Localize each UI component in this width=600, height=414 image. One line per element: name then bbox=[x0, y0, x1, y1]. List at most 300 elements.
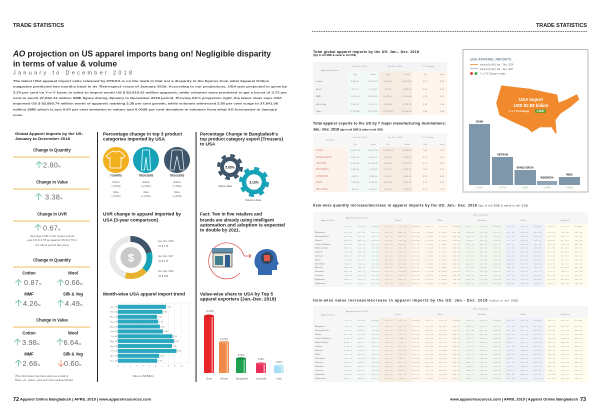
import bars by country bbox=[469, 120, 580, 190]
map of USA: USA Import bbox=[519, 97, 544, 102]
table: imports by country: 30,141.60 bbox=[368, 150, 379, 152]
table: imports by country: 4.16 bbox=[440, 182, 445, 184]
table: imports by country: 1,612.07 bbox=[369, 189, 378, 191]
table: global imports by segment: 3.38 bbox=[440, 111, 445, 113]
table: imports by country: 1,097.61 bbox=[384, 182, 393, 184]
icon: denim trousers bbox=[133, 147, 159, 173]
table: item-wise quantity: Jan-17 Jan-18 Change Jan-17 Jan-18 Change Jan-17 Jan-18 Change Jan-17 Jan-18 Change Jan-17 Jan-18 Change Jan-17 Jan-18 Change bbox=[344, 225, 583, 228]
change in quantity by fibre: 4.26% bbox=[23, 299, 41, 308]
change in quantity stat: 2.80% bbox=[43, 160, 61, 170]
table: imports by country: 1,054.80 bbox=[351, 182, 360, 184]
table: imports by country: 2,062.41 bbox=[351, 157, 360, 159]
icon: volume gear: 3.13% bbox=[249, 180, 259, 184]
heading: item-wise value table: Item-wise value increase/decrease in apparel imports by the US: Jan.- Dec. 2018 (value in mil US$) bbox=[313, 298, 518, 302]
table 3 values: 276.84 289.51 104.58 98.625 103.41 104.85 2.0851 2.1476 103.00 174.32 182.64 104.77 88.147 91.733 104.07 87.215 90.522 103.79 bbox=[344, 251, 583, 254]
heading: to USA bbox=[200, 142, 216, 146]
fact text bbox=[200, 212, 285, 232]
change in quantity by fibre: Silk & Veg bbox=[63, 292, 83, 296]
donut labels: US $ 3.76 bbox=[158, 261, 169, 263]
intro paragraph bbox=[13, 79, 288, 117]
article title bbox=[12, 48, 271, 68]
table: global imports by segment: 0.66 bbox=[423, 89, 428, 91]
table 3 row labels: Trousers bbox=[315, 274, 324, 277]
column chart: Bangladesh bbox=[236, 378, 249, 380]
panel: value-wise share by top 5 exporters bbox=[200, 292, 284, 380]
article title: in terms of value & volume bbox=[13, 58, 117, 68]
table: global imports by segment: 37,146.88 bbox=[402, 96, 413, 98]
table 4 values: 3841.7 3962.5 103.14 2412.6 2483.2 102.93 21.684 22.718 104.77 1392.4 1447.8 103.98 874.36 911.52 104.25 518.04 536.28 103.52 bbox=[344, 377, 583, 380]
change in value stat bbox=[13, 180, 90, 202]
table 3 row labels: Knit Shirts bbox=[315, 262, 326, 265]
donut labels: Jan.-Dec. 2017 bbox=[158, 256, 174, 258]
right page footer bbox=[449, 397, 586, 403]
table: global imports by segment: 2.80 bbox=[423, 111, 428, 113]
table 3 values: 512.36 525.18 102.50 189.23 193.87 102.45 7.6230 7.8845 103.43 307.41 316.24 102.87 146.32 150.68 102.98 163.28 168.73 103.33 bbox=[344, 243, 583, 246]
import bars by country: 5.37% bbox=[499, 186, 507, 190]
table: imports by country: 5.16 bbox=[423, 163, 428, 165]
table: imports by country: 3,741.55 bbox=[403, 182, 412, 184]
heading: total global imports table: Total global apparel imports by the US: Jan.- Dec. 2018 bbox=[313, 50, 419, 54]
change in quantity by fibre bbox=[13, 258, 90, 308]
table: imports by country: Y-Y Change bbox=[422, 137, 435, 139]
map of USA: Y o Y % Change bbox=[509, 109, 530, 113]
table: imports by country: 2,309.56 bbox=[369, 176, 378, 178]
horizontal bar chart: Jul-18 bbox=[111, 336, 118, 338]
table: global imports by segment: 9,566.91 bbox=[384, 81, 393, 83]
table: imports by country: 12,211.73 bbox=[402, 163, 413, 165]
map legend bbox=[470, 58, 514, 76]
heading: total imports by manufacturing destinations: Jan.- Dec. 2018 (qty in mil SME & value in mil US$) bbox=[313, 128, 383, 132]
table: global imports by segment: 80,178.81 bbox=[368, 111, 379, 113]
intro paragraph: issue. bbox=[13, 113, 23, 117]
table: item-wise value: Synthetic bbox=[478, 313, 487, 316]
column chart: China bbox=[206, 378, 213, 380]
import bars by country: CHINA bbox=[476, 120, 484, 124]
table 4 values: 6127.3 6318.5 103.12 4214.6 4332.7 102.80 62.841 65.124 103.63 1812.4 1885.6 104.04 1387.2 1442.8 104.01 425.21 442.77 104.13 bbox=[344, 357, 583, 360]
map legend: USA APPAREL IMPORTS bbox=[470, 58, 512, 62]
import bars by country: VIETNAM bbox=[497, 154, 508, 156]
panel: UVR change bbox=[103, 212, 181, 278]
table: global imports by segment: 4.49 bbox=[423, 104, 428, 106]
change in quantity by fibre: 4.49% bbox=[65, 299, 83, 308]
horizontal bar chart: May-18 bbox=[110, 326, 118, 328]
right page header: TRADE STATISTICS bbox=[536, 23, 588, 29]
trousers labels: Value bbox=[174, 192, 181, 194]
table: imports by country: Jan.-Dec. 2018 bbox=[388, 137, 403, 139]
column chart: 3.40% bbox=[258, 359, 264, 361]
change in value by fibre: 3.98% bbox=[22, 338, 40, 347]
table 4 values: 742.15 768.32 103.53 267.34 275.91 103.21 38.426 40.287 104.84 421.72 437.28 103.69 285.64 296.47 103.79 136.08 140.81 103.48 bbox=[344, 353, 583, 356]
table 4 values: 2412.8 2466.3 102.22 1233.5 1267.4 102.75 24.112 25.607 106.20 1098.4 1121.7 102.12 772.45 788.13 102.03 325.91 333.60 102.36 bbox=[344, 325, 583, 328]
table 4 values: 3216.8 3291.5 102.32 612.47 629.38 102.76 71.512 74.806 104.61 2461.3 2515.8 102.21 1824.6 1869.3 102.45 636.72 646.51 101.54 bbox=[344, 349, 583, 352]
denim labels: (+0.66%) bbox=[141, 186, 151, 188]
table: global imports by segment: Silk & Veg bbox=[316, 104, 327, 106]
change in value by fibre: 2.66% bbox=[22, 359, 41, 368]
gear labels: Volume data bbox=[245, 198, 261, 202]
donut labels: Jan.-Dec. 2018 bbox=[158, 241, 174, 243]
import bars by country: 1.42% bbox=[476, 186, 484, 190]
table: global imports by segment: 0.87 bbox=[423, 81, 428, 83]
change in UVR stat: (Average UVR in the review period bbox=[30, 234, 75, 238]
fact text: to double by 2021. bbox=[200, 228, 240, 232]
sidebar heading: January to December 2018 bbox=[15, 137, 70, 141]
trousers labels: (-1.69%) bbox=[173, 186, 182, 188]
table: imports by country: 2,139.71 bbox=[384, 157, 393, 159]
change in value by fibre: 6.64% bbox=[64, 338, 82, 347]
table: global imports by segment: Qty bbox=[423, 73, 428, 76]
intro paragraph: cent to touch 27,842.44 million SME figure during January to December 2018 period. Proving AO's projection right, the latest stats says USA bbox=[13, 96, 283, 100]
panel: top 3 product categories bbox=[103, 132, 190, 198]
table 4 values: 3512.4 3627.1 103.27 2087.6 2146.2 102.81 46.137 48.215 104.50 1312.5 1362.8 103.83 1024.3 1062.7 103.75 288.17 300.04 104.12 bbox=[344, 341, 583, 344]
change in quantity stat bbox=[13, 148, 90, 170]
table: global imports by segment: 3.98 bbox=[440, 81, 445, 83]
heading: USA (3-year comparison) bbox=[103, 218, 158, 222]
column chart: India bbox=[277, 378, 282, 380]
table: imports by country: 3.13 bbox=[423, 157, 428, 159]
table: item-wise value: Man-made fibre bbox=[473, 308, 489, 310]
table: imports by country: Value bbox=[439, 144, 445, 146]
table 3 values: 386.72 398.14 102.95 178.61 183.42 102.69 0.9714 1.0235 105.36 205.38 212.95 103.69 152.76 157.42 103.05 52.615 55.530 105.54 bbox=[344, 278, 583, 281]
column chart: 14.74% bbox=[220, 339, 228, 341]
horizontal bar chart: Apr-18 bbox=[110, 320, 118, 323]
table 3 values: 1342.7 1381.4 102.88 932.18 951.46 102.07 2.9054 3.0218 104.01 402.87 421.33 104.58 288.94 299.05 103.50 113.57 119.62 105.33 bbox=[344, 262, 583, 265]
horizontal bar chart: Sep-18 bbox=[110, 346, 118, 348]
sidebar footnote: fibers, viz. cotton, wool and man-made/synthetic) bbox=[15, 378, 73, 382]
table: global imports by segment: 15,695.61 bbox=[383, 96, 394, 98]
heading bbox=[200, 292, 276, 302]
table: imports by country: Qty bbox=[386, 143, 391, 146]
panel: month-wise import trend bbox=[103, 292, 189, 378]
gear labels: Value data bbox=[218, 184, 232, 188]
t-shirts labels: (-0.54%) bbox=[112, 196, 121, 198]
trousers labels: (-4.44%) bbox=[173, 196, 182, 198]
fact text: Fact: Two in five retailers and bbox=[200, 212, 262, 216]
table: imports by country: 10,625.40 bbox=[350, 150, 361, 152]
heading bbox=[103, 132, 182, 142]
horizontal bar chart: Jan-18 bbox=[110, 307, 118, 309]
table: global imports by segment: Value bbox=[404, 74, 410, 76]
donut labels: Jan.-Dec. 2016 bbox=[158, 271, 174, 273]
table 4 row labels bbox=[315, 325, 332, 380]
change in UVR stat: the same period last year) bbox=[35, 243, 69, 247]
change in value by fibre: Change in Value bbox=[36, 318, 69, 322]
table: imports by country: 4.06 bbox=[423, 182, 428, 184]
horizontal bar chart: Nov-18 bbox=[110, 356, 118, 358]
table: imports by country: 11,589.08 bbox=[368, 163, 379, 165]
t-shirts labels: Volume bbox=[112, 182, 121, 184]
table 4 row labels: Dresses bbox=[315, 349, 324, 352]
donut labels: US $ 3.85 bbox=[158, 276, 169, 278]
map of USA: 3.38% bbox=[537, 109, 545, 113]
table: global imports by segment: 2,890.45 bbox=[403, 89, 412, 91]
table: global imports by segment: Value bbox=[370, 74, 376, 76]
panel: retail fact bbox=[200, 212, 285, 279]
horizontal bar chart: 8.60 bbox=[177, 351, 182, 353]
sidebar footnote bbox=[15, 374, 73, 382]
table 4 values: 14218. 14716. 103.50 9824.5 10118. 102.99 247.31 258.64 104.58 3998.6 4184.4 104.65 2812.5 2941.7 104.59 1186.1 1242.7 104.77 bbox=[344, 369, 583, 372]
heading: Percentage change in top 3 product bbox=[103, 132, 182, 136]
table: imports by country: VIETNAM bbox=[316, 162, 326, 165]
column chart: 6.51% bbox=[238, 355, 244, 357]
table: item-wise quantity: Apparel Imports (in mil) bbox=[346, 216, 369, 220]
table 3 row labels: Shirts & Tops bbox=[315, 247, 329, 250]
table 3 values: 358.46 369.15 102.98 134.71 139.26 103.38 1.3302 1.3915 104.61 217.62 223.87 102.87 155.38 160.24 103.13 62.115 64.031 103.08 bbox=[344, 266, 583, 269]
table: item-wise value bbox=[313, 306, 588, 382]
table 3 values: 927.42 947.18 102.13 481.27 488.94 101.59 4.1035 4.2216 102.88 429.61 441.53 102.77 312.65 318.44 101.85 112.27 115.06 102.48 bbox=[344, 231, 583, 234]
column chart: 4.51% bbox=[276, 362, 282, 364]
horizontal bar chart: 6.60 bbox=[164, 331, 169, 333]
table 4 row labels: Skirts bbox=[315, 353, 321, 356]
change in value by fibre: Cotton bbox=[22, 330, 36, 336]
table: imports by country: 5,055.52 bbox=[369, 157, 378, 159]
icon: store in circle with arrow to head bbox=[209, 243, 279, 279]
donut chart: $ bbox=[128, 252, 134, 264]
heading: Percentage Change in Bangladesh's bbox=[200, 132, 278, 136]
horizontal bar chart: Mar-18 bbox=[110, 316, 118, 319]
import bars by country: BANGLADESH bbox=[517, 166, 534, 170]
table: imports by country: 3.72 bbox=[423, 189, 428, 191]
table 3 row labels: Coats & Blazers bbox=[315, 243, 332, 246]
table: global imports by segment: 27,081.86 bbox=[350, 111, 361, 113]
table 3 row labels: Babywear bbox=[315, 231, 325, 234]
table: global imports by segment: 4.26 bbox=[423, 96, 428, 98]
table 4 row labels: Shirts & Tops bbox=[315, 341, 329, 344]
table 3 row labels: Underwear bbox=[315, 282, 326, 285]
table 3 row labels: Gloves bbox=[315, 240, 323, 242]
map legend: Y o Y % Change in value bbox=[480, 74, 506, 76]
article title: AO projection on US apparel imports bang on! Negligible disparity bbox=[12, 48, 271, 58]
table 4 row labels: Blouses bbox=[315, 362, 324, 364]
table: global imports by segment: 2,710.43 bbox=[369, 89, 378, 91]
table: global imports by segment: MMF bbox=[316, 96, 322, 98]
change in quantity by fibre: Cotton bbox=[22, 270, 36, 276]
table 4 row labels: Sweaters bbox=[315, 365, 325, 368]
change in UVR stat bbox=[13, 212, 90, 247]
table 4 values: 1786.2 1853.4 103.76 452.71 469.15 103.63 64.283 68.541 106.62 1214.6 1267.2 104.33 812.54 847.63 104.32 402.03 419.61 104.37 bbox=[344, 345, 583, 348]
import bars by country: INDIA bbox=[566, 174, 573, 176]
table: global imports by segment: 82,880.74 bbox=[402, 111, 413, 113]
table: item-wise quantity: Synthetic bbox=[478, 219, 487, 222]
change in value by fibre: Silk & Veg bbox=[63, 352, 83, 356]
table 3 values: 142.65 149.27 104.64 65.384 67.921 103.88 0.8142 0.8571 105.27 75.243 79.184 105.24 50.662 53.104 104.82 24.518 25.776 105.13 bbox=[344, 258, 583, 261]
table: imports by country: 5.37 bbox=[440, 163, 445, 165]
table: imports by country: 3,664.81 bbox=[384, 163, 393, 165]
table 3 row labels: Hosiery/Socks bbox=[315, 235, 330, 238]
table: global imports by segment: 2.66 bbox=[440, 96, 445, 98]
table: imports by country: 30,568.19 bbox=[402, 150, 413, 152]
import bars by country: 4.16% bbox=[566, 186, 574, 190]
change in quantity by fibre: MMF bbox=[24, 292, 34, 296]
table: global imports by segment: -0.60 bbox=[440, 104, 445, 106]
table 4 values: 4871.2 5024.6 103.15 1923.8 1987.3 103.30 586.41 612.74 104.49 2298.4 2374.5 103.31 1312.6 1361.2 103.70 985.78 1013.3 102.79 bbox=[344, 365, 583, 368]
map legend: Imports (in Mil.) Jan. - Dec. 2017 bbox=[480, 68, 514, 71]
heading: item-wise quantity table: Item-wise quantity increase/decrease in apparel imports by the US: Jan.- Dec. 2018 (qty in mil SME & value in mil US$) bbox=[313, 204, 528, 208]
left page header: TRADE STATISTICS bbox=[13, 23, 65, 29]
map legend: Imports (in Mil.) Jan. - Dec. 2018 bbox=[480, 64, 514, 66]
table: imports by country: 1,074.07 bbox=[384, 169, 393, 171]
table: item-wise quantity: Apparel Items bbox=[321, 219, 336, 222]
table: imports by country: 1,730.42 bbox=[403, 189, 412, 191]
table 4 row labels: Hosiery/Socks bbox=[315, 329, 330, 332]
heading: Value-wise share to USA by Top 5 bbox=[200, 292, 273, 296]
horizontal bar chart: Oct-18 bbox=[110, 350, 118, 353]
table: global imports by segment: Wool bbox=[316, 89, 321, 91]
heading: total imports by manufacturing destinations: Total apparel exports to the US by 7 major manufacturing destinations: bbox=[313, 122, 446, 126]
table: global imports by segment: Jan.-Dec. 2017 bbox=[353, 66, 368, 68]
table 3 row labels: Nightwear bbox=[315, 278, 325, 281]
map of USA bbox=[497, 86, 579, 133]
heading: categories imported by USA bbox=[103, 136, 166, 142]
change in value by fibre: 0.60% bbox=[64, 359, 82, 368]
chart note: (Value in US$ Billion) bbox=[132, 376, 154, 378]
table: imports by country: Jan.-Dec. 2017 bbox=[353, 137, 368, 139]
table: global imports by segment: Qty bbox=[386, 73, 391, 76]
table 3 values: 618.27 633.45 102.46 141.36 145.82 103.15 1.2463 1.3127 105.33 473.81 484.51 102.26 341.22 350.48 102.71 132.45 135.87 102.58 bbox=[344, 254, 583, 258]
heading: top product category export (Trousers) bbox=[200, 136, 283, 142]
denim labels: TROUSERS bbox=[139, 174, 153, 178]
horizontal bar chart: 6.20 bbox=[160, 326, 166, 328]
table: global imports by segment: 36,183.45 bbox=[368, 96, 379, 98]
table: imports by country: 2.76 bbox=[440, 169, 445, 171]
intro paragraph: The latest USA apparel import stats released by OTEXA is on the mark in that not a disparity in the figures from what Apparel Online bbox=[13, 79, 269, 83]
gear labels bbox=[218, 184, 261, 202]
table 3 row labels: Dresses bbox=[315, 254, 324, 258]
table 4 row labels: Gloves bbox=[315, 334, 323, 336]
left page footer: 72 bbox=[13, 397, 19, 403]
table: imports by country: 2,495.33 bbox=[403, 176, 412, 178]
table: item-wise value: Cotton bbox=[395, 313, 402, 316]
table 3 values: 1247.6 1284.5 102.96 743.28 761.52 102.45 0.6531 0.6872 105.22 501.42 521.47 104.00 318.65 331.29 103.97 182.77 190.18 104.05 bbox=[344, 282, 583, 285]
table: imports by country: 5,405.13 bbox=[403, 157, 412, 159]
panel: USA apparel imports map and bars bbox=[463, 50, 588, 192]
table: imports by country: -0.87 bbox=[422, 169, 428, 171]
table: imports by country: 619.73 bbox=[352, 176, 359, 178]
table: imports by country: 5.65 bbox=[440, 157, 445, 159]
table 4 values: 1512.6 1558.4 103.03 583.47 601.26 103.05 28.315 29.672 104.79 883.21 911.37 103.19 612.74 632.51 103.23 270.47 278.86 103.10 bbox=[344, 361, 583, 364]
horizontal bar chart: 8.13 bbox=[173, 336, 178, 338]
table: global imports by segment: 152.26 bbox=[385, 89, 392, 91]
table: global imports by segment: Qty bbox=[353, 73, 358, 76]
horizontal bar chart: 5.77 bbox=[158, 360, 163, 362]
table: imports by country: 312.78 bbox=[385, 189, 392, 191]
table: global imports by segment: 27,841.08 bbox=[383, 111, 394, 113]
heading: Month-wise USA apparel import trend bbox=[103, 292, 185, 296]
table 4 row labels: Nightwear bbox=[315, 373, 325, 376]
horizontal bar chart: 5.75 bbox=[159, 321, 164, 323]
table: imports by country: Countries bbox=[325, 138, 336, 142]
table: global imports by segment: Jan.-Dec. 2018 bbox=[388, 66, 403, 68]
table: imports by country: SRI LANKA bbox=[316, 188, 328, 191]
table: imports by country: Qty bbox=[353, 143, 358, 146]
table 4 row labels: Knit Shirts bbox=[315, 357, 326, 360]
column chart: 41.00% bbox=[206, 311, 214, 313]
horizontal bar chart: Aug-18 bbox=[110, 340, 118, 343]
table: item-wise value: Cellulosic bbox=[560, 314, 571, 316]
column chart: Vietnam bbox=[220, 378, 228, 380]
table 3 values: 894.16 921.73 103.08 536.72 551.38 102.73 5.4118 5.6207 103.86 349.23 361.95 103.64 277.15 285.46 103.00 78.402 81.276 103.67 bbox=[344, 247, 583, 250]
table: imports by country: 3,484.93 bbox=[351, 163, 360, 165]
t-shirts labels bbox=[110, 174, 122, 198]
horizontal bar chart: Feb-18 bbox=[110, 312, 118, 314]
table 3 row labels: Blouses bbox=[315, 267, 324, 269]
table: item-wise quantity: Cotton bbox=[520, 219, 527, 222]
icon: trousers bbox=[164, 147, 190, 173]
trousers labels bbox=[170, 174, 184, 198]
sidebar heading: Global Apparel Imports by the US: bbox=[15, 132, 83, 136]
subtitle: January to December 2018 bbox=[13, 70, 132, 76]
table: item-wise quantity: Cellulosic bbox=[560, 220, 571, 222]
table 3 row labels: Jackets bbox=[315, 251, 323, 254]
fact text: brands are already using intelligent bbox=[200, 218, 274, 222]
table: global imports by segment: 37,613.21 bbox=[368, 81, 379, 83]
heading bbox=[200, 132, 283, 146]
t-shirts labels: T-SHIRTS bbox=[110, 174, 122, 178]
table: global imports by segment: Y-Y Change bbox=[422, 66, 435, 68]
change in value by fibre: Wool bbox=[68, 330, 78, 336]
table: imports by country: 301.55 bbox=[352, 189, 359, 191]
change in quantity by fibre: 0.87% bbox=[24, 278, 42, 287]
trousers labels: TROUSERS bbox=[170, 174, 184, 178]
table 4 values: 1624.8 1678.3 103.29 842.61 867.24 102.92 12.517 13.204 105.49 761.42 789.63 103.70 564.87 586.41 103.81 196.55 203.22 103.39 bbox=[344, 373, 583, 376]
right page footer: www.apparelresources.com | APRIL 2019 | Apparel Online Bangladesh bbox=[449, 398, 579, 402]
table 3 row labels bbox=[315, 231, 332, 285]
table: imports by country: 8.04 bbox=[440, 176, 445, 178]
panel: Bangladesh trousers export change bbox=[200, 132, 283, 202]
sidebar footnote: (The information has been given as a total of bbox=[15, 374, 68, 378]
horizontal bar chart: 6.13 bbox=[160, 356, 165, 358]
table: global imports by segment: 2,391.47 bbox=[351, 104, 360, 106]
denim labels: Volume bbox=[142, 182, 151, 184]
table: global imports by segment: 3,671.72 bbox=[369, 104, 378, 106]
donut labels bbox=[158, 241, 174, 278]
horizontal bar chart: 7.95 bbox=[172, 346, 178, 348]
import bars by country: INDONESIA bbox=[540, 176, 554, 180]
change in quantity stat: Change in Quantity bbox=[33, 148, 71, 152]
table: imports by country: INDONESIA bbox=[316, 168, 329, 171]
heading: total global imports table bbox=[313, 50, 419, 57]
sidebar heading bbox=[15, 132, 83, 141]
table: global imports by segment: 3,733.76 bbox=[403, 104, 412, 106]
denim labels: (+4.65%) bbox=[141, 196, 151, 198]
table: global imports by segment: Total bbox=[316, 110, 321, 113]
table 4 row labels: Jackets bbox=[315, 345, 323, 348]
heading: total global imports table: (Qty in mil SME & value in mil US$) bbox=[313, 53, 356, 57]
change in value by fibre bbox=[13, 318, 90, 368]
table: item-wise quantity bbox=[313, 212, 588, 287]
table: imports by country: 4,233.12 bbox=[403, 169, 412, 171]
change in value stat: Change in Value bbox=[36, 180, 69, 184]
horizontal bar chart: 012345678910 bbox=[117, 366, 184, 368]
change in UVR stat: was US $ 3.78 as against US $ 3.76 in bbox=[27, 238, 77, 242]
table: global imports by segment: Value bbox=[439, 74, 445, 76]
table: global imports by segment: 39,109.65 bbox=[402, 81, 413, 83]
table: item-wise value: Apparel Items bbox=[321, 314, 336, 316]
heading: UVR change in apparel imported by bbox=[103, 212, 181, 216]
heading bbox=[103, 212, 181, 222]
table 4 row labels: Underwear bbox=[315, 377, 326, 380]
donut labels: US $ 3.78 bbox=[158, 246, 169, 248]
table: item-wise value: Wool bbox=[438, 314, 443, 316]
table: imports by country: 658.52 bbox=[385, 176, 392, 178]
table 3 values: 465.18 481.92 103.60 211.53 219.06 103.56 6.7125 6.9843 104.05 242.47 251.38 103.67 139.74 145.61 104.20 102.73 105.77 102.96 bbox=[344, 270, 583, 273]
intro paragraph: 3.23 per cent on Y-o-Y basis in value to import worth US $ 82,919.32 million apparels, while volumes were predicted to get a boost of 3.72 per bbox=[13, 90, 288, 94]
table: item-wise value: Apparel Imports (in mil) bbox=[346, 310, 369, 313]
table: imports by country: 10,842.13 bbox=[383, 150, 394, 152]
change in UVR stat: Change in UVR bbox=[37, 212, 67, 216]
table: imports by country bbox=[313, 133, 447, 192]
table: imports by country: Value bbox=[404, 144, 410, 146]
table: global imports by segment bbox=[313, 62, 447, 115]
